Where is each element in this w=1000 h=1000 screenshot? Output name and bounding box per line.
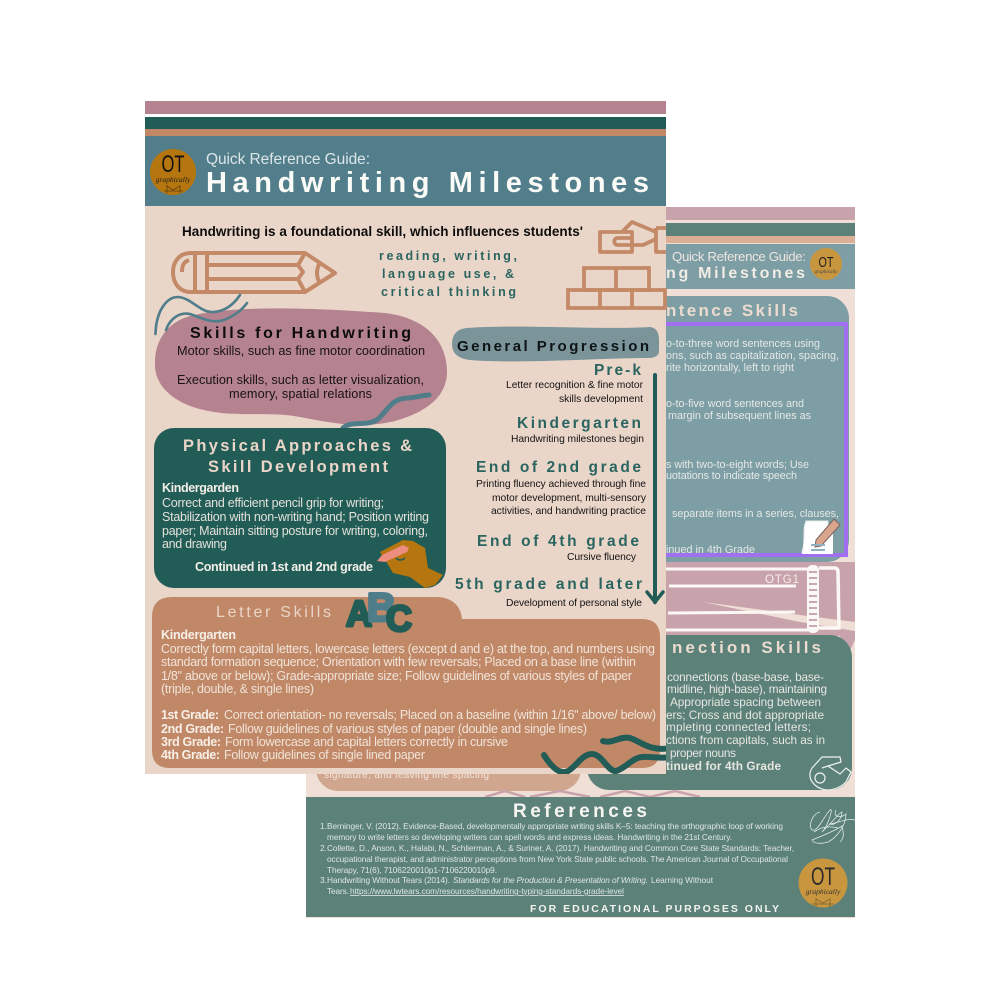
icon: hand placing brick [600,222,666,252]
panel: letter skills: standard formation sequence; Orientation with few reversals; Placed on a base line (within [161,655,636,669]
panel: letter skills [152,597,660,768]
panel: physical approaches: Physical Approaches & [183,437,412,455]
title [206,151,649,199]
panel: skills for handwriting: Skills for Handwriting [190,325,411,342]
panel: letter skills: 1st Grade: [161,708,219,722]
icon: logo: OT [162,151,185,178]
panel: sentence skills: inued in 4th Grade [666,544,755,556]
panel: letter skills: Form lowercase and capital letters correctly in cursive [225,735,508,749]
panel: letter skills: 4th Grade: [161,748,220,762]
intro sentence: Handwriting is a foundational skill, which influences students' [182,224,583,239]
milestone: 5th grade and later: Development of personal style [506,598,642,609]
milestone: kindergarten: Kindergarten [517,415,641,432]
panel: sentence skills: s with two-to-eight words; Use [666,459,809,471]
references list: Berninger, V. (2012). Evidence-Based, developmentally appropriate writing skills K–5: teaching the orthographic loop of working [327,821,783,831]
panel: sentence skills: o-to-three word sentences using [666,338,820,350]
panel: general progression heading [452,327,659,361]
milestone: 5th grade and later: 5th grade and later [455,576,642,593]
references list: 1. [320,821,327,831]
references list: Tears. [327,886,349,896]
back page header text: ng Milestones [666,265,805,282]
panel: connection skills: midline, high-base), maintaining [667,682,827,696]
icon: hand with crayon [377,540,443,588]
panel: physical approaches: and drawing [162,537,227,551]
milestone: end of 2nd grade: activities, and handwriting practice [491,506,646,517]
panel: skills for handwriting: Motor skills, such as fine motor coordination [177,344,425,358]
milestone: end of 2nd grade: Printing fluency achieved through fine [476,479,646,490]
panel: physical approaches: paper; Maintain sitting posture for writing, coloring, [162,524,428,538]
back page header text [666,249,806,282]
influences list: language use, & [382,267,514,281]
panel: connection skills: tinued for 4th Grade [666,759,781,773]
panel: physical approaches: Skill Development [208,458,388,476]
back page header text: Quick Reference Guide: [672,249,806,264]
decorative pink zigzag [485,791,700,797]
icon: logo: graphically [156,175,191,184]
panel: connection skills: ers; Cross and dot appropriate [666,708,824,722]
icon: back page logo [810,248,842,280]
milestone: end of 4th grade: End of 4th grade [477,533,639,550]
panel: letter skills: 3rd Grade: [161,735,221,749]
panel: letter skills: Kindergarten [161,628,236,642]
references list: 3. [320,875,327,885]
decorative blue squiggles [156,295,429,428]
icon: ABC letters [346,586,412,639]
milestone: end of 2nd grade: End of 2nd grade [476,459,641,476]
references list: https://www.lwtears.com/resources/handwriting-typing-standards-grade-level [350,886,624,896]
panel: sentence skills: o-to-five word sentences and [666,398,804,410]
panel: physical approaches [154,428,446,588]
milestone: kindergarten: Handwriting milestones begin [511,434,644,445]
references list: occupational therapist, and administrator perceptions from New York State public schools. The American Journal of Occupational [327,854,788,864]
panel: skills for handwriting: memory, spatial relations [229,387,372,401]
heading: references: References [513,801,647,822]
signature [810,809,855,843]
milestone: pre-k [506,362,644,405]
panel: sentence skills [480,296,849,562]
icon: ABC letters: C [386,598,412,639]
panel: letter skills: (triple, double, & single lines) [161,682,314,696]
panel: connection skills: proper nouns [670,746,736,760]
milestone: end of 2nd grade [476,459,647,517]
panel: connection skills: nection Skills [672,638,821,657]
panel: physical approaches: Kindergarden [162,481,239,495]
panel: physical approaches: Continued in 1st and 2nd grade [195,560,373,574]
references list: Standards for the Production & Presentation of Writing. [453,875,648,885]
panel: sentence skills: separate items in a series, clauses, [672,508,839,520]
milestone: pre-k: skills development [559,394,643,405]
milestone: kindergarten [511,415,644,445]
milestone: end of 2nd grade: motor development, multi-sensory [492,493,647,504]
icon: hand outline [810,757,851,790]
references list: Handwriting Without Tears (2014). [327,875,450,885]
panel: letter skills: Follow guidelines of various styles of paper (double and single lines) [228,722,587,736]
panel: connection skills: connections (base-base, base- [667,670,824,684]
influences list [379,249,517,299]
panel: letter skills: 2nd Grade: [161,722,224,736]
references list: Therapy, 71(6), 7106220010p1-7106220010p9. [327,865,497,875]
panel: connection skills: Appropriate spacing between [670,695,821,709]
icon: pencil [173,253,335,292]
panel: general progression heading: General Progression [457,338,649,355]
panel: sentence skills: rite horizontally, left to right [666,362,794,374]
milestone: end of 4th grade: Cursive fluency [567,552,637,563]
panel: physical approaches: Correct and efficient pencil grip for writing; [162,496,384,510]
panel: connection skills: mpleting connected letters; [666,720,811,734]
panel: letter skills: Correctly form capital letters, lowercase letters (except d and e) at the top, and numbers using [161,642,655,656]
panel: letter skills: Correct orientation- no reversals; Placed on a baseline (within 1/16" above/ below) [224,708,656,722]
icon: references logo [798,858,848,908]
panel: connection skills [587,635,852,790]
title: Handwriting Milestones [206,167,649,199]
illustration: pink brush stroke with pencil [640,562,855,655]
panel: connection skills: ctions from capitals, such as in [666,733,825,747]
references list: Learning Without [651,875,714,885]
panel: sentence skills: uotations to indicate speech [666,470,797,482]
icon: paper and pencil [802,519,840,553]
panel: skills for handwriting: Execution skills, such as letter visualization, [177,373,424,387]
decorative green squiggles [544,738,670,772]
panel: sentence skills: margin of subsequent lines as [668,410,812,422]
references list: Collette, D., Anson, K., Halabi, N., Schlierman, A., & Suriner, A. (2017). Handwriting and Common Core State Standards: Teacher, [327,843,794,853]
icon: ABC letters: B [367,586,396,630]
front page: background [145,136,666,774]
header bands [145,101,666,206]
influences list: critical thinking [381,285,516,299]
influences list: reading, writing, [379,249,517,263]
footer note: FOR EDUCATIONAL PURPOSES ONLY [530,903,779,915]
panel: letter formation continued (back page): signature, and leaving line spacing [324,770,489,781]
milestone: pre-k: Pre-k [594,362,641,379]
icon: logo [150,149,196,195]
panel: references [306,797,855,917]
panel: letter skills: 1/8" above or below); Grade-appropriate size; Follow guidelines of various styles of paper [161,669,632,683]
panel: skills for handwriting [155,308,447,425]
references list: memory to write letters so developing writers can spell words and express ideas. Handwriting in the 21st Century. [327,832,732,842]
icon: brick wall [568,268,665,308]
panel: sentence skills: ons, such as capitalization, spacing, [666,350,839,362]
panel: letter skills: Letter Skills [216,604,331,621]
icon: references logo: graphically [806,887,841,896]
icon: back page logo: OT [818,254,834,271]
references list [320,821,794,896]
back page: background [306,207,855,918]
panel: sentence skills: ntence Skills [666,301,798,320]
milestone: 5th grade and later [455,576,642,609]
illustration: pink brush stroke with pencil: OTG1 [765,574,799,586]
icon: ABC letters: A [346,593,372,634]
title: Quick Reference Guide: [206,151,370,168]
icon: references logo: OT [811,863,835,891]
panel: letter skills: Follow guidelines of single lined paper [224,748,425,762]
progression timeline arrow [647,375,663,602]
milestone: end of 4th grade [477,533,639,563]
panel: physical approaches: Stabilization with non-writing hand; Position writing [162,510,429,524]
milestone: pre-k: Letter recognition & fine motor [506,380,644,391]
references list: 2. [320,843,327,853]
icon: back page logo: graphically [814,270,838,275]
panel: letter formation continued (back page) [316,700,581,791]
